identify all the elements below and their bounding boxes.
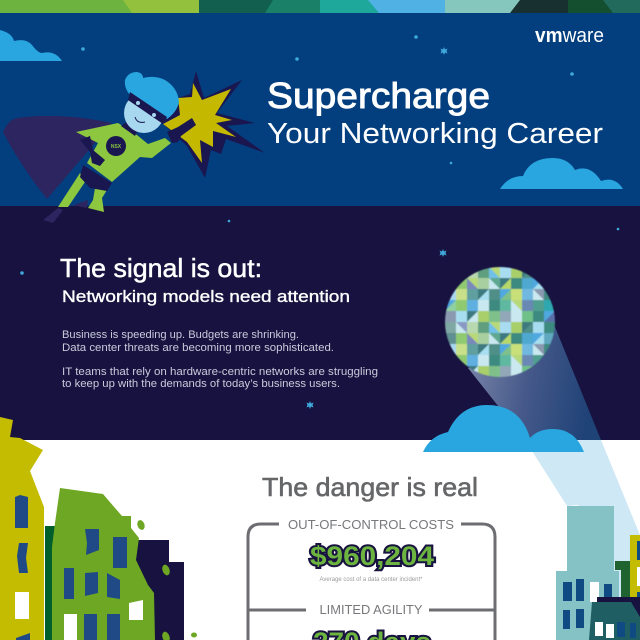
hero fist bbox=[167, 118, 196, 143]
signal body text: Business is speeding up. Budgets are shrinking. bbox=[62, 329, 299, 341]
city: right buildings bbox=[556, 506, 640, 640]
hero neck bbox=[121, 121, 138, 136]
stat: limited agility bbox=[313, 603, 431, 640]
hero boots bbox=[43, 200, 88, 223]
signal heading: The signal is out: bbox=[60, 253, 262, 283]
yellow building bbox=[0, 417, 44, 640]
signal disc bbox=[445, 267, 555, 377]
title: Supercharge bbox=[267, 75, 490, 116]
navy roof bbox=[597, 597, 640, 617]
burst outline bbox=[163, 71, 265, 178]
hero mask bbox=[128, 92, 167, 124]
hero chest logo bbox=[106, 136, 126, 156]
debris bbox=[136, 519, 197, 640]
signal body text: to keep up with the demands of today’s business users. bbox=[62, 378, 340, 390]
dark teal building windows bbox=[595, 622, 636, 638]
title bbox=[267, 75, 604, 150]
teal building windows bbox=[563, 579, 612, 629]
yellow building windows bbox=[15, 495, 30, 640]
stat: out-of-control costs: OUT-OF-CONTROL COSTS bbox=[288, 518, 454, 532]
title: Your Networking Career bbox=[267, 118, 604, 150]
green building bbox=[52, 488, 155, 640]
stars bbox=[20, 35, 619, 409]
background: hero band bbox=[0, 13, 640, 206]
background: danger section bbox=[0, 440, 640, 640]
top colour band bbox=[0, 0, 640, 13]
hero head bbox=[124, 93, 164, 133]
green building windows bbox=[64, 529, 143, 640]
hero cape bbox=[3, 116, 112, 199]
cloud: right of title bbox=[500, 158, 623, 189]
hero rear glove bbox=[80, 136, 105, 166]
signal body text bbox=[62, 329, 378, 390]
yellow building bbox=[630, 535, 640, 625]
illustration: superhero with burst bbox=[3, 71, 265, 223]
stat: limited agility: LIMITED AGILITY bbox=[320, 603, 423, 617]
cloud: under spotlight bbox=[423, 405, 584, 452]
teal buildings bbox=[556, 506, 619, 640]
logo: vmware: vmware bbox=[535, 25, 604, 47]
cloud: top left bbox=[0, 30, 62, 61]
stat: out-of-control costs: Average cost of a data center incident* bbox=[320, 577, 423, 583]
dark green building bbox=[615, 561, 630, 600]
dark green building bbox=[45, 526, 57, 640]
spotlight beam on sky bbox=[468, 327, 601, 440]
signal heading: Networking models need attention bbox=[62, 288, 350, 306]
navy building bbox=[130, 540, 184, 640]
danger frame bbox=[248, 524, 495, 640]
danger heading: The danger is real bbox=[262, 472, 478, 502]
hero hair bbox=[125, 72, 179, 119]
hero eyes bbox=[136, 101, 156, 117]
dark teal building bbox=[589, 602, 640, 640]
signal body text: Data center threats are becoming more sophisticated. bbox=[62, 342, 334, 354]
stat: out-of-control costs: $960,204 bbox=[310, 541, 434, 571]
hero torso bbox=[76, 123, 171, 182]
hero legs bbox=[58, 173, 107, 212]
hero chest logo: NSX bbox=[111, 144, 122, 150]
signal heading bbox=[60, 253, 350, 306]
stat: out-of-control costs bbox=[288, 518, 454, 583]
signal body text: IT teams that rely on hardware-centric networks are struggling bbox=[62, 366, 378, 378]
background: signal section bbox=[0, 206, 640, 440]
hero shorts bbox=[80, 165, 112, 191]
city: left buildings bbox=[0, 417, 197, 640]
hero smile bbox=[135, 117, 145, 122]
burst fill bbox=[163, 83, 236, 163]
spotlight beam on ground bbox=[525, 440, 640, 640]
yellow building windows bbox=[637, 541, 640, 612]
